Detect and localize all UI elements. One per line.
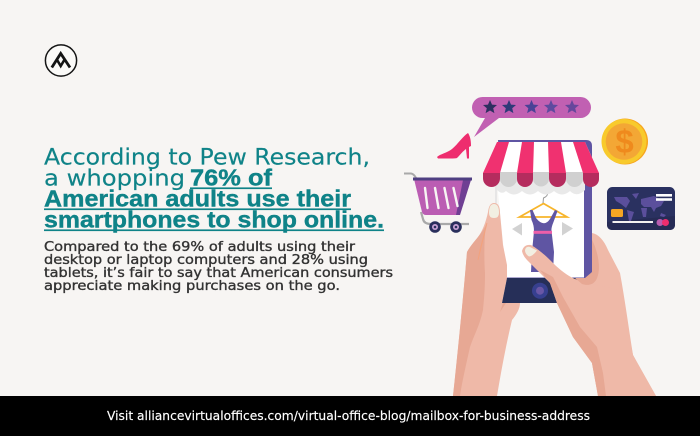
product arrows bbox=[512, 222, 573, 236]
heading: American adults use their bbox=[44, 186, 351, 212]
illustration: mobile shopping bbox=[404, 97, 675, 396]
icon: high heel bbox=[437, 133, 471, 158]
body text: tablets, it’s fair to say that American consumers bbox=[44, 266, 393, 281]
right hand: thumb and wrist bbox=[522, 240, 656, 396]
icon: gold coin bbox=[602, 118, 648, 164]
awning bbox=[483, 142, 599, 194]
heading: According to Pew Research, bbox=[44, 144, 370, 170]
right hand: palm behind phone bbox=[557, 233, 656, 396]
phone bbox=[483, 140, 599, 279]
hanger and dress bbox=[520, 192, 567, 272]
heading: 76% of bbox=[190, 164, 272, 190]
body text: appreciate making purchases on the go. bbox=[44, 279, 340, 294]
heading bbox=[44, 144, 384, 232]
footer bar: Visit alliancevirtualoffices.com/virtual-office-blog/mailbox-for-business-address bbox=[107, 408, 590, 423]
heading: a whopping bbox=[44, 166, 185, 192]
icon: credit card bbox=[607, 187, 675, 230]
body text: Compared to the 69% of adults using their bbox=[44, 240, 356, 255]
icon: gold coin: $ bbox=[615, 123, 634, 160]
body text: desktop or laptop computers and 28% using bbox=[44, 253, 368, 268]
footer bar bbox=[0, 396, 700, 436]
rating speech bubble bbox=[472, 97, 591, 137]
icon: company logo bbox=[45, 45, 77, 76]
heading: smartphones to shop online. bbox=[44, 206, 384, 232]
phone bottom bar bbox=[500, 278, 584, 312]
body text bbox=[44, 240, 393, 294]
icon: shopping cart bbox=[404, 174, 472, 233]
left hand bbox=[453, 203, 520, 396]
